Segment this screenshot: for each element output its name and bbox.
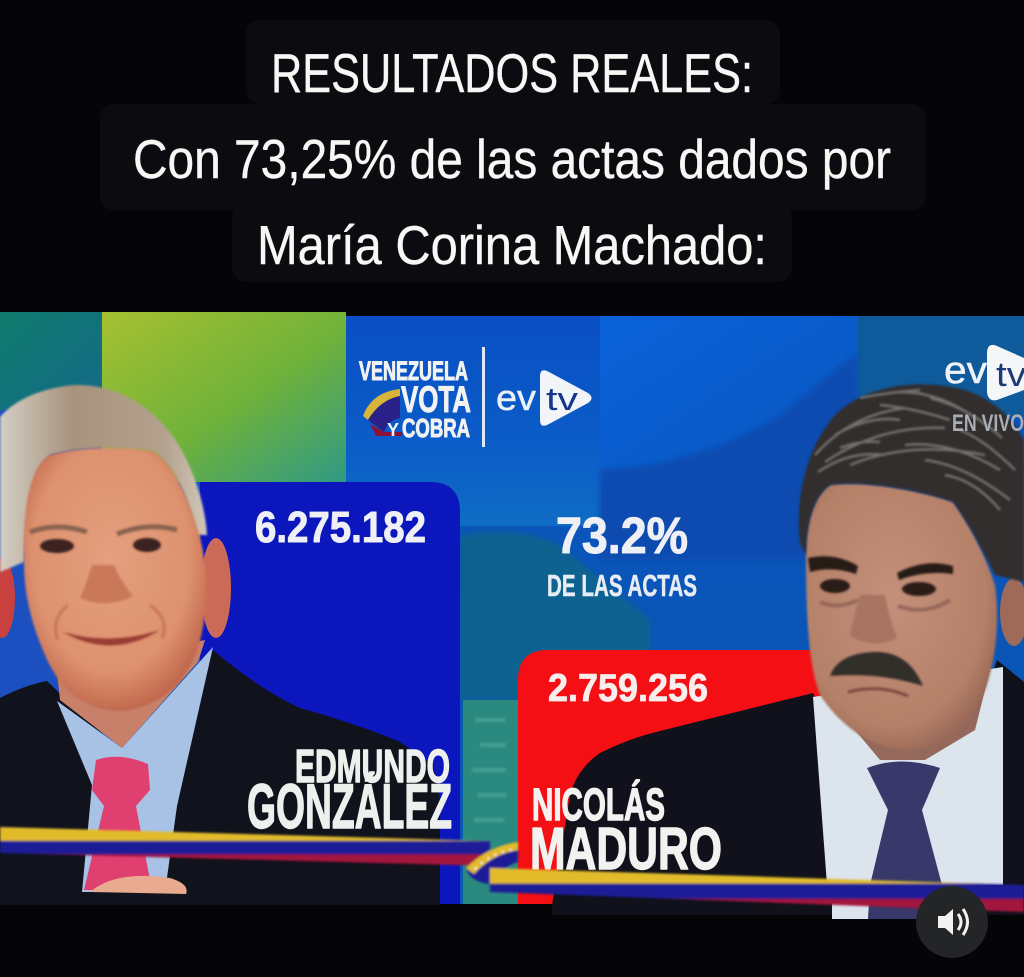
portrait: Nicolás Maduro [552,384,1024,919]
name: Nicolás Maduro: MADURO [530,816,722,882]
title [100,20,926,282]
logo: EVTV corner with en vivo [944,345,1024,437]
tie [84,757,150,890]
nose [850,595,897,644]
panel: blue González vote box [200,482,460,904]
tie [867,762,942,919]
cheek creases [56,605,164,640]
shirt [813,667,1003,885]
face [24,448,206,711]
name: Edmundo González: EDMUNDO [295,740,450,792]
logo: EVTV center: ev [496,377,536,418]
title backing boxes [100,20,926,282]
number: Maduro votes: 2.759.256 [548,667,708,710]
logo: EVTV center [496,370,592,426]
icon: sound button [916,886,988,958]
logo: EVTV corner with en vivo: tv [996,356,1024,394]
screen background [0,312,1024,904]
logo: EVTV center: tv [546,381,578,417]
facial details [808,556,953,696]
name: Nicolás Maduro [530,779,722,882]
label: de las actas: DE LAS ACTAS [547,568,697,603]
nose [80,565,133,604]
neck [57,640,205,748]
hair [0,385,207,572]
hand [90,876,187,894]
eyebrows [808,556,858,574]
smile [63,630,160,646]
jacket [0,650,440,905]
number: percent of actas: 73.2% [556,507,688,564]
moustache [830,652,923,686]
neck [830,670,990,760]
logo divider [482,347,485,447]
shirt tail [832,890,912,919]
eyebrows [30,527,87,532]
eyes [40,539,74,553]
logo: Venezuela Vota y Cobra: VOTA [401,379,471,420]
number: González votes: 6.275.182 [255,503,426,552]
logo: Venezuela Vota y Cobra: Y [387,420,399,440]
name: Edmundo González [247,740,452,842]
shirt [57,647,213,892]
jacket [552,660,1024,915]
hair [799,384,1024,582]
title text [133,42,891,276]
face [806,484,997,750]
title text: María Corina Machado: [257,214,767,276]
title text: Con 73,25% de las actas dados por [133,128,891,190]
logo: Venezuela Vota y Cobra [359,356,471,443]
panel: red Maduro vote box [518,650,830,904]
ears [201,538,231,638]
hair highlights [815,390,1015,510]
name: Edmundo González: GONZÁLEZ [247,772,452,842]
logo: Venezuela Vota y Cobra: VENEZUELA [359,356,468,386]
ribbon: Venezuelan flag [0,827,1024,912]
portrait: Edmundo González [0,385,440,905]
mouth [848,689,908,696]
under-eye shadow [820,600,950,610]
logo: EVTV corner with en vivo: ev [944,350,987,392]
panel: broadcast screen [0,312,1024,919]
title text: RESULTADOS REALES: [271,42,753,104]
facial details [30,527,177,646]
name: Nicolás Maduro: NICOLÁS [532,779,665,830]
eyes [820,579,850,593]
ear [1000,578,1024,646]
logo: Venezuela Vota y Cobra: COBRA [402,413,470,443]
